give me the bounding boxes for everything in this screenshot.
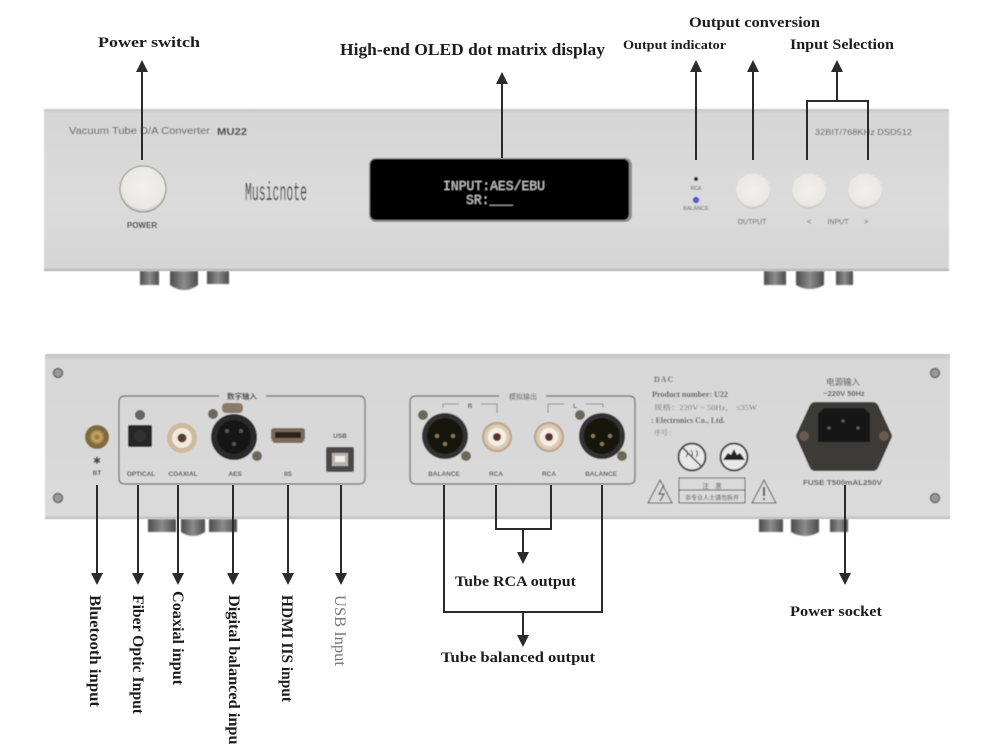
input buttons (792, 174, 882, 226)
power socket: 电源输入 (826, 377, 860, 387)
OLED display: SR:___ (466, 193, 514, 209)
analog output group (410, 392, 635, 484)
arrow: output conversion (747, 60, 759, 160)
optical jack: OPTICAL (127, 471, 155, 478)
OLED display (369, 158, 632, 222)
product information: Product number: U22 (652, 390, 728, 399)
arrow: power socket (839, 485, 851, 585)
analog output group: 模拟输出 (509, 392, 537, 401)
Bluetooth connector (85, 425, 109, 477)
power socket: FUSE T500mAL250V (803, 478, 882, 487)
coaxial jack (167, 423, 198, 478)
digital input group: 数字输入 (227, 391, 257, 401)
OLED display: INPUT:AES/EBU (443, 179, 545, 195)
input buttons: > (864, 219, 868, 226)
indicators (683, 177, 709, 212)
power socket (796, 377, 892, 487)
digital input group (119, 391, 365, 484)
balanced output L (575, 410, 627, 478)
analog output group: R (468, 404, 473, 410)
arrow: OLED display (496, 72, 508, 158)
indicators: RCA (691, 186, 702, 192)
indicators: BALANCE (683, 206, 709, 212)
balanced output R: BALANCE (428, 471, 461, 478)
arrow: fiber optic input (132, 485, 144, 585)
panel: rear of the DAC (45, 354, 950, 519)
output button: OUTPUT (738, 219, 767, 226)
power button: POWER (127, 221, 157, 230)
arrow: tube balanced output (444, 485, 602, 647)
label: tube balanced output: Tube balanced output (441, 650, 595, 666)
arrow: HDMI IIS input (282, 485, 294, 585)
model text: Vacuum Tube D/A Converter (69, 125, 211, 137)
balanced output R (418, 410, 471, 478)
model text: MU22 (217, 126, 247, 138)
power button (120, 166, 166, 230)
label: coaxial input: Coaxial input (169, 591, 186, 686)
label: bluetooth input: Bluetooth input (86, 595, 103, 708)
optical jack (127, 410, 155, 478)
analog output group: L (573, 404, 577, 410)
Bluetooth connector: ✱ (93, 456, 101, 467)
input buttons: < (807, 219, 811, 226)
label: input selection: Input Selection (790, 37, 895, 53)
spec text: 32BIT/768KHz DSD512 (815, 127, 912, 137)
USB jack: USB (333, 433, 347, 440)
input buttons: INPUT (828, 219, 849, 226)
warning labels: 非专业人士请勿拆开 (685, 494, 739, 502)
label: HDMI IIS input: HDMI IIS input (278, 595, 295, 703)
safety icons (678, 444, 748, 470)
panel: front of the DAC: Musicnote (245, 178, 307, 208)
rear panel feet (148, 519, 848, 536)
HDMI jack (271, 428, 305, 478)
arrow: tube RCA output (496, 485, 551, 564)
coaxial jack: COAXIAL (168, 471, 198, 478)
label: power switch: Power switch (98, 35, 201, 51)
panel: front of the DAC (44, 109, 949, 271)
arrow: input selection (807, 60, 868, 160)
Bluetooth connector: BT (93, 470, 101, 477)
product information: 序号： (654, 428, 675, 437)
arrow: coaxial input (172, 485, 184, 585)
label: OLED display: High-end OLED dot matrix display (340, 40, 606, 59)
warning labels: 注 意 (702, 481, 722, 490)
arrow: power switch (136, 60, 148, 160)
arrow: bluetooth input (91, 485, 103, 585)
screws (54, 368, 940, 502)
output button (736, 174, 770, 226)
label: digital balanced input: Digital balanced input (225, 595, 242, 744)
product information: : Electronics Co., Ltd. (651, 416, 725, 425)
product information (651, 375, 758, 437)
AES jack: AES (228, 471, 242, 478)
label: fiber optic input: Fiber Optic Input (129, 595, 146, 715)
arrow: USB input (335, 485, 347, 585)
label: USB input: USB Input (331, 595, 348, 667)
power socket: ~220V 50Hz (823, 389, 865, 398)
arrow: output indicator (690, 60, 702, 160)
model text (69, 125, 247, 138)
RCA output L (534, 422, 564, 478)
product information: 规格：220V ~ 50Hz， ≤35W (654, 402, 758, 413)
label: power socket: Power socket (790, 604, 882, 620)
label: tube RCA output: Tube RCA output (455, 574, 576, 590)
arrow: digital balanced input (227, 485, 239, 585)
RCA output R (482, 422, 512, 478)
balanced output L: BALANCE (585, 471, 618, 478)
product information: DAC (654, 375, 674, 384)
warning labels (648, 478, 776, 503)
label: output conversion: Output conversion (689, 15, 821, 31)
front panel feet (140, 271, 853, 290)
RCA output R: RCA (489, 471, 503, 478)
AES jack (208, 403, 262, 478)
USB jack (326, 433, 354, 472)
label: output indicator: Output indicator (623, 37, 726, 52)
HDMI jack: IIS (284, 471, 293, 478)
RCA output L: RCA (542, 471, 556, 478)
